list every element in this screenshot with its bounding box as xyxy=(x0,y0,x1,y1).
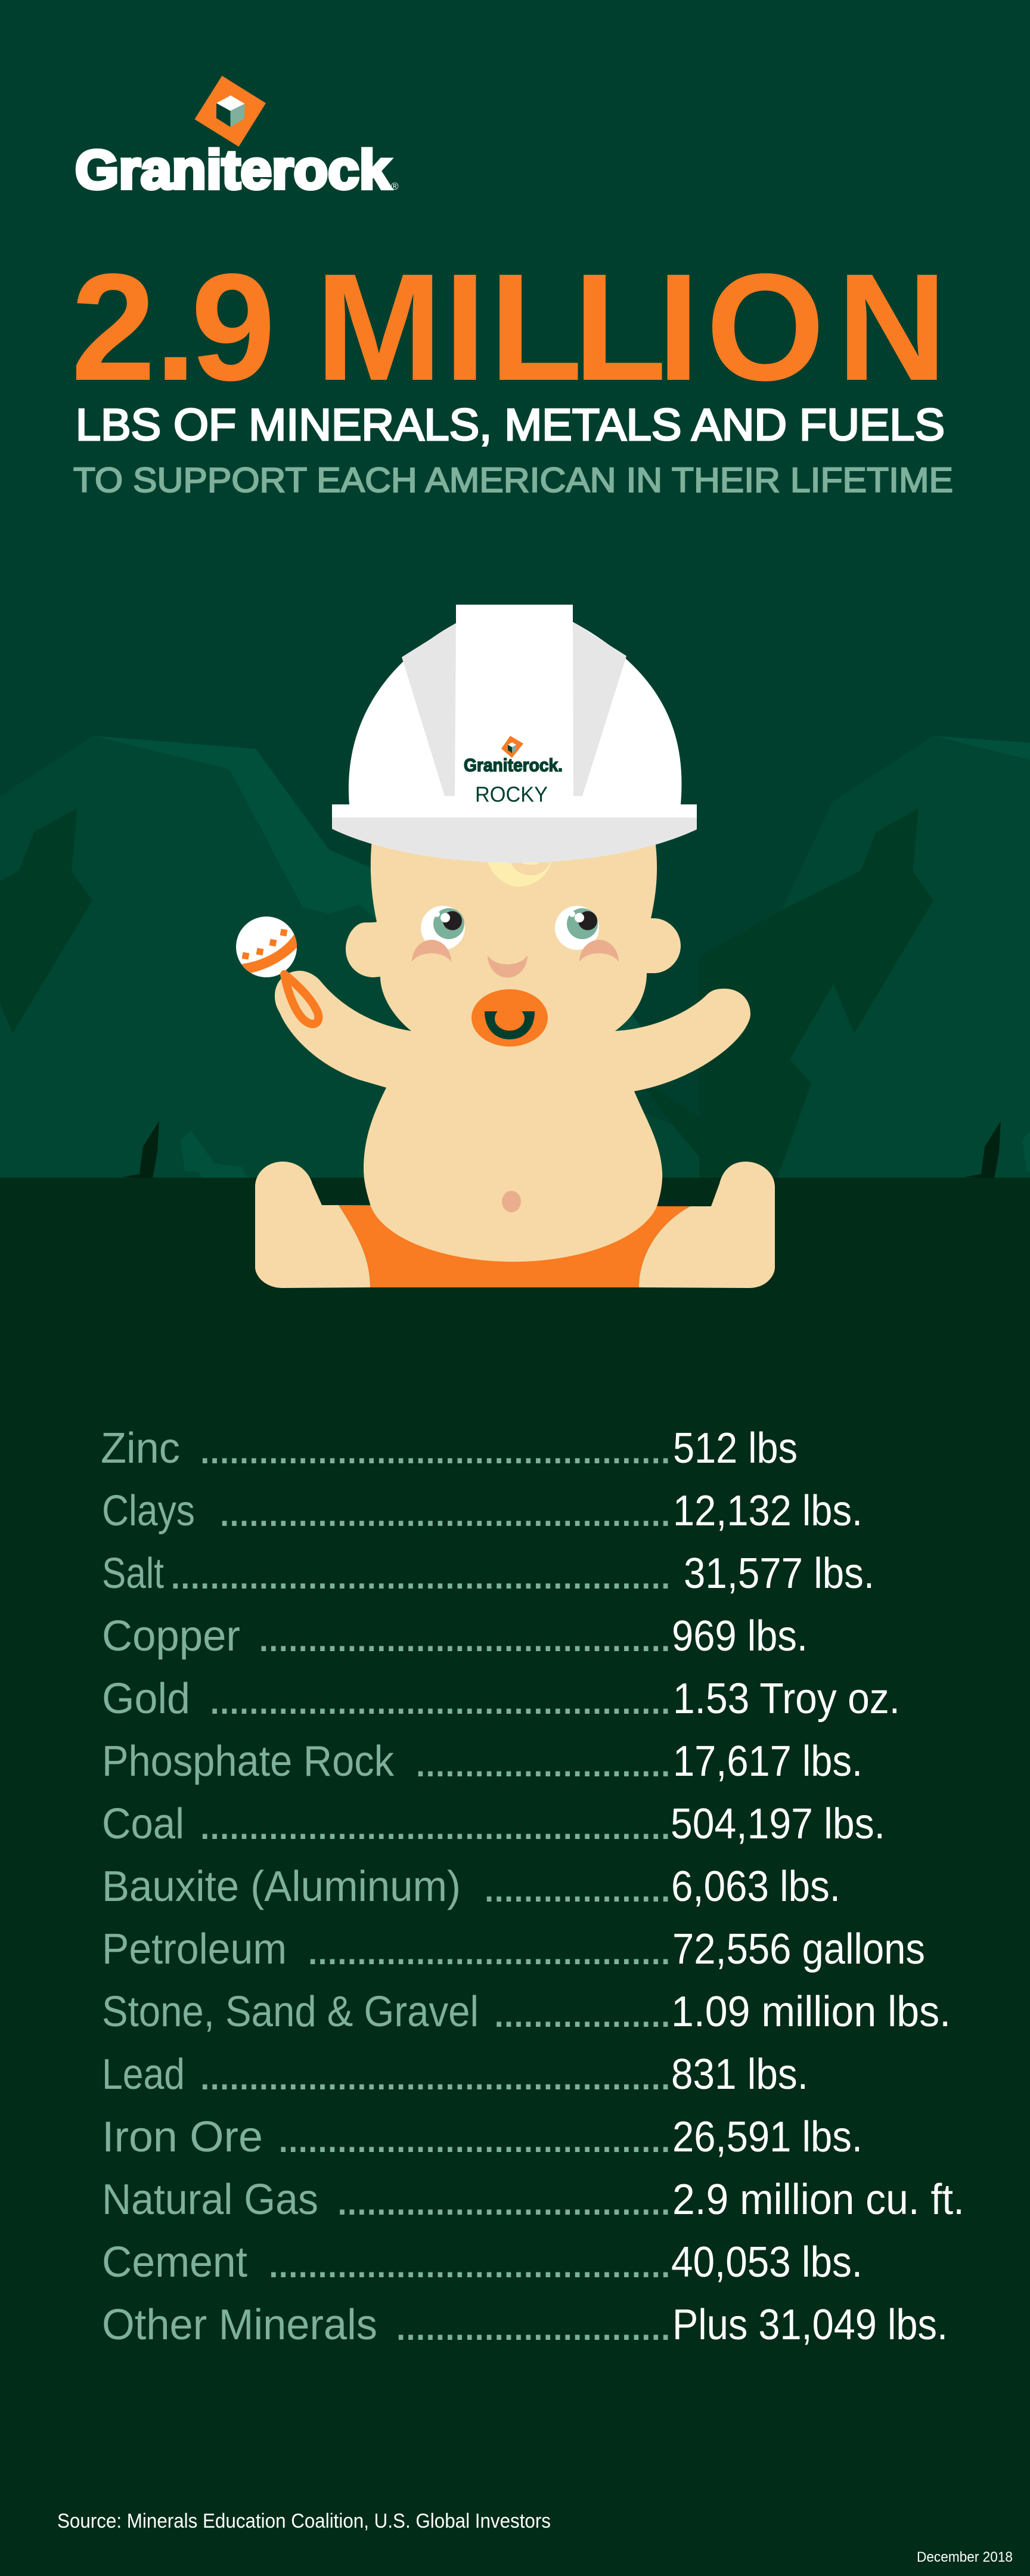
row: cement: 40,053 lbs. xyxy=(671,2238,863,2286)
row: coal: 504,197 lbs. xyxy=(671,1800,885,1848)
row: salt: Salt xyxy=(102,1550,164,1597)
row: natural gas xyxy=(102,2172,964,2225)
background: sky panel xyxy=(0,0,1030,1178)
row: iron ore: 26,591 lbs. xyxy=(672,2113,863,2161)
pacifier xyxy=(471,989,548,1046)
row: stone: 1.09 million lbs. xyxy=(671,1988,951,2036)
row: copper: .......................................... xyxy=(257,1608,669,1661)
title: 2.9 MILLION: 2.9 MILLION xyxy=(71,242,947,413)
row: zinc: ................................................ xyxy=(198,1420,669,1473)
row: lead: Lead xyxy=(102,2051,185,2098)
eye: right xyxy=(555,906,599,950)
row: cement: Cement xyxy=(102,2238,247,2286)
row: iron ore xyxy=(102,2109,863,2162)
row: copper: 969 lbs. xyxy=(672,1612,808,1660)
logo: Graniterock: ® xyxy=(391,181,399,192)
nose xyxy=(488,955,528,978)
hard hat xyxy=(332,605,697,863)
cheek: right xyxy=(579,940,619,978)
row: gold: Gold xyxy=(102,1675,190,1723)
row: bauxite xyxy=(102,1859,840,1912)
row: bauxite: 6,063 lbs. xyxy=(671,1863,840,1911)
row: copper xyxy=(102,1608,808,1661)
row: iron ore: Iron Ore xyxy=(102,2113,263,2161)
row: natural gas: 2.9 million cu. ft. xyxy=(672,2176,964,2224)
row: petroleum: ..................................... xyxy=(306,1921,669,1974)
row: phosphate rock: .......................... xyxy=(414,1733,669,1787)
date note: December 2018 xyxy=(917,2549,1013,2565)
row: copper: Copper xyxy=(102,1612,240,1660)
row: coal xyxy=(102,1796,885,1849)
hair curl xyxy=(486,840,551,887)
row: phosphate rock: Phosphate Rock xyxy=(102,1738,395,1785)
row: iron ore: ........................................ xyxy=(277,2109,669,2162)
background: ground panel xyxy=(0,1178,1030,2576)
row: clays: .............................................. xyxy=(218,1483,669,1536)
row: cement: ......................................... xyxy=(267,2234,669,2287)
row: petroleum: Petroleum xyxy=(102,1925,287,1973)
row: gold xyxy=(102,1671,900,1724)
hat logo: Graniterock. xyxy=(464,755,563,775)
row: gold: ............................................... xyxy=(208,1671,669,1724)
row: phosphate rock xyxy=(102,1733,863,1787)
row: lead: ................................................ xyxy=(198,2046,669,2100)
cheek: left xyxy=(412,940,451,978)
eye: left xyxy=(421,906,465,950)
row: phosphate rock: 17,617 lbs. xyxy=(673,1738,863,1785)
list: minerals xyxy=(101,1420,964,2350)
row: clays xyxy=(102,1483,863,1536)
legs xyxy=(255,1162,775,1288)
logo: Graniterock: Graniterock xyxy=(75,140,391,200)
baby character xyxy=(255,835,775,1288)
logo: Graniterock xyxy=(75,76,399,200)
row: lead xyxy=(102,2046,808,2100)
row: natural gas: .................................. xyxy=(336,2172,669,2225)
row: bauxite: ................... xyxy=(483,1859,669,1912)
row: clays: 12,132 lbs. xyxy=(673,1487,863,1535)
row: zinc xyxy=(101,1420,798,1473)
row: stone xyxy=(102,1984,951,2037)
row: coal: ................................................ xyxy=(198,1796,669,1849)
mountains: right group xyxy=(615,736,1030,1178)
row: lead: 831 lbs. xyxy=(671,2051,808,2098)
row: salt: ................................................... xyxy=(169,1546,669,1599)
row: cement xyxy=(102,2234,863,2287)
row: salt: 31,577 lbs. xyxy=(684,1550,874,1597)
row: stone: Stone, Sand & Gravel xyxy=(102,1988,479,2036)
body head and arms xyxy=(275,835,750,1262)
row: salt xyxy=(102,1546,874,1599)
row: other minerals: Other Minerals xyxy=(102,2301,377,2349)
row: natural gas: Natural Gas xyxy=(102,2176,318,2224)
row: petroleum xyxy=(102,1921,925,1974)
subtitle: lbs of minerals: LBS OF MINERALS, METALS AND FUELS xyxy=(76,400,945,450)
subtitle: to support: TO SUPPORT EACH AMERICAN IN THEIR LIFETIME xyxy=(73,461,953,500)
row: gold: 1.53 Troy oz. xyxy=(673,1675,900,1723)
row: coal: Coal xyxy=(102,1800,184,1848)
hat logo xyxy=(464,736,563,775)
source note: Source: Minerals Education Coalition, U.S. Global Investors xyxy=(57,2510,551,2532)
row: petroleum: 72,556 gallons xyxy=(672,1925,925,1973)
navel xyxy=(502,1191,521,1212)
row: stone: .................. xyxy=(492,1984,669,2037)
row: zinc: 512 lbs xyxy=(673,1425,798,1472)
row: other minerals xyxy=(102,2297,948,2350)
row: clays: Clays xyxy=(102,1487,195,1535)
diaper xyxy=(339,1205,690,1287)
hat name: ROCKY xyxy=(475,782,548,806)
row: other minerals: Plus 31,049 lbs. xyxy=(672,2301,948,2349)
row: zinc: Zinc xyxy=(101,1425,180,1472)
row: other minerals: ............................ xyxy=(394,2297,669,2350)
icon: rattle xyxy=(236,917,318,1024)
row: bauxite: Bauxite (Aluminum) xyxy=(102,1863,461,1911)
mountains: left group xyxy=(0,736,417,1178)
